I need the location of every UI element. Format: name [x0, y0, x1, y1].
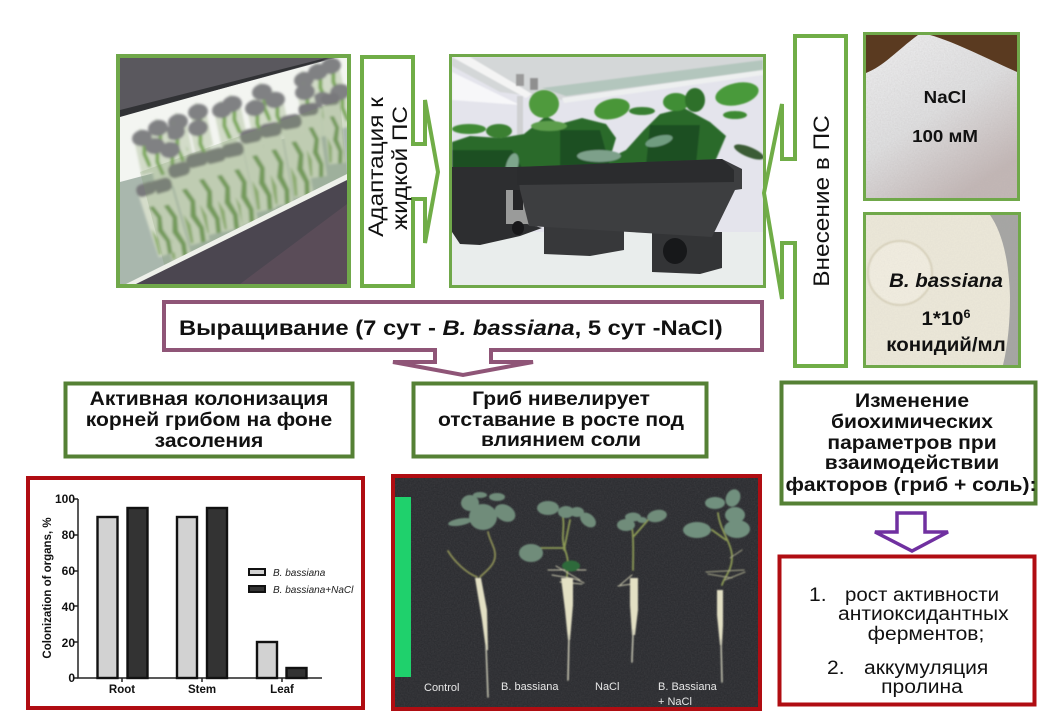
photo captions: Control [424, 682, 459, 694]
plant: NaCl [617, 508, 668, 662]
x axis labels: Leaf [270, 684, 294, 696]
x axis labels: Stem [188, 684, 216, 696]
panel: potted plants photo [449, 54, 766, 288]
legend: B. bassiana [273, 568, 326, 579]
heading: root colonization: корней грибом на фоне [86, 410, 332, 431]
arrow: purple down [875, 513, 948, 551]
heading: fungus offsets growth lag: отставание в росте под [438, 410, 684, 431]
panel: biochemical results list: рост активности [845, 584, 999, 606]
panel: biochemical results list: антиоксидантных [838, 604, 1009, 625]
chart axes [73, 499, 322, 682]
panel: biochemical results list: пролина [881, 677, 964, 698]
photo captions: NaCl [595, 681, 619, 693]
legend [249, 568, 354, 596]
label: dose: 6 [964, 307, 971, 321]
heading: biochemical changes [782, 382, 1036, 504]
y axis labels [55, 492, 75, 685]
heading: fungus offsets growth lag [414, 384, 706, 456]
plant: B. bassiana [519, 501, 599, 680]
y axis labels: 60 [62, 564, 75, 578]
heading: fungus offsets growth lag: влиянием соли [481, 430, 641, 451]
bars [98, 508, 306, 678]
heading: biochemical changes: параметров при [827, 433, 997, 454]
label: species: B. bassiana [889, 270, 1003, 292]
label: dose: 1*10 [921, 308, 964, 330]
panel: biochemical results list: аккумуляция [864, 658, 988, 679]
plant foliage [452, 81, 763, 167]
panel: biochemical results list: 2. [827, 658, 845, 679]
y axis labels: 0 [68, 671, 75, 685]
panel: biochemical results list: ферментов; [868, 624, 984, 645]
heading: root colonization [66, 384, 352, 456]
y axis labels: 20 [62, 636, 75, 650]
main tray [517, 159, 742, 237]
ruler [395, 497, 411, 677]
photo captions: B. Bassiana [658, 681, 718, 693]
panel: plants photo [391, 474, 762, 711]
x axis labels: Root [109, 684, 135, 696]
arrow callout: cultivation [164, 302, 762, 375]
left tray [452, 167, 542, 245]
y axis title: Colonization of organs, % [42, 517, 54, 659]
plant: control [448, 492, 519, 697]
photo captions: B. bassiana [501, 681, 559, 693]
heading: biochemical changes: факторов (гриб + соль): [786, 475, 1036, 496]
tray legs [544, 226, 624, 256]
panel: NaCl photo [863, 32, 1020, 201]
heading: biochemical changes: взаимодействии [825, 453, 999, 474]
panel: B. bassiana culture photo [863, 212, 1021, 368]
arrow callout: added to nutrient solution [764, 36, 846, 366]
heading: biochemical changes: биохимических [831, 412, 994, 433]
y axis labels: 80 [62, 528, 75, 542]
label: NaCl: NaCl [924, 86, 966, 107]
x axis labels [109, 684, 294, 696]
heading: root colonization: засоления [155, 431, 263, 452]
plant: B. bassiana + NaCl [683, 487, 750, 682]
y axis labels: 40 [62, 600, 75, 614]
panel: test tube plantlets photo [116, 54, 357, 288]
label: cultivation: Выращивание (7 сут - B. bassiana, 5 сут -NaCl) [179, 316, 723, 340]
photo captions [424, 681, 718, 708]
photo captions: + NaCl [658, 696, 692, 708]
panel: biochemical results list [780, 556, 1034, 704]
legend: B. bassiana+NaCl [273, 585, 354, 596]
arrow callout: adaptation [362, 57, 438, 286]
label: adaptation: Адаптация к [364, 96, 388, 237]
panel: colonization bar chart [28, 478, 363, 708]
panel: biochemical results list: 1. [809, 585, 827, 606]
label: liquid nutrient solution: жидкой ПС [388, 106, 412, 230]
heading: fungus offsets growth lag: Гриб нивелирует [472, 389, 650, 410]
heading: biochemical changes: Изменение [855, 391, 969, 412]
y axis labels: 100 [55, 492, 75, 506]
heading: root colonization: Активная колонизация [90, 389, 328, 410]
label: concentration: 100 мМ [912, 125, 978, 146]
label: added to nutrient solution: Внесение в ПС [809, 115, 834, 287]
label: conidia per ml: конидий/мл [886, 334, 1006, 356]
